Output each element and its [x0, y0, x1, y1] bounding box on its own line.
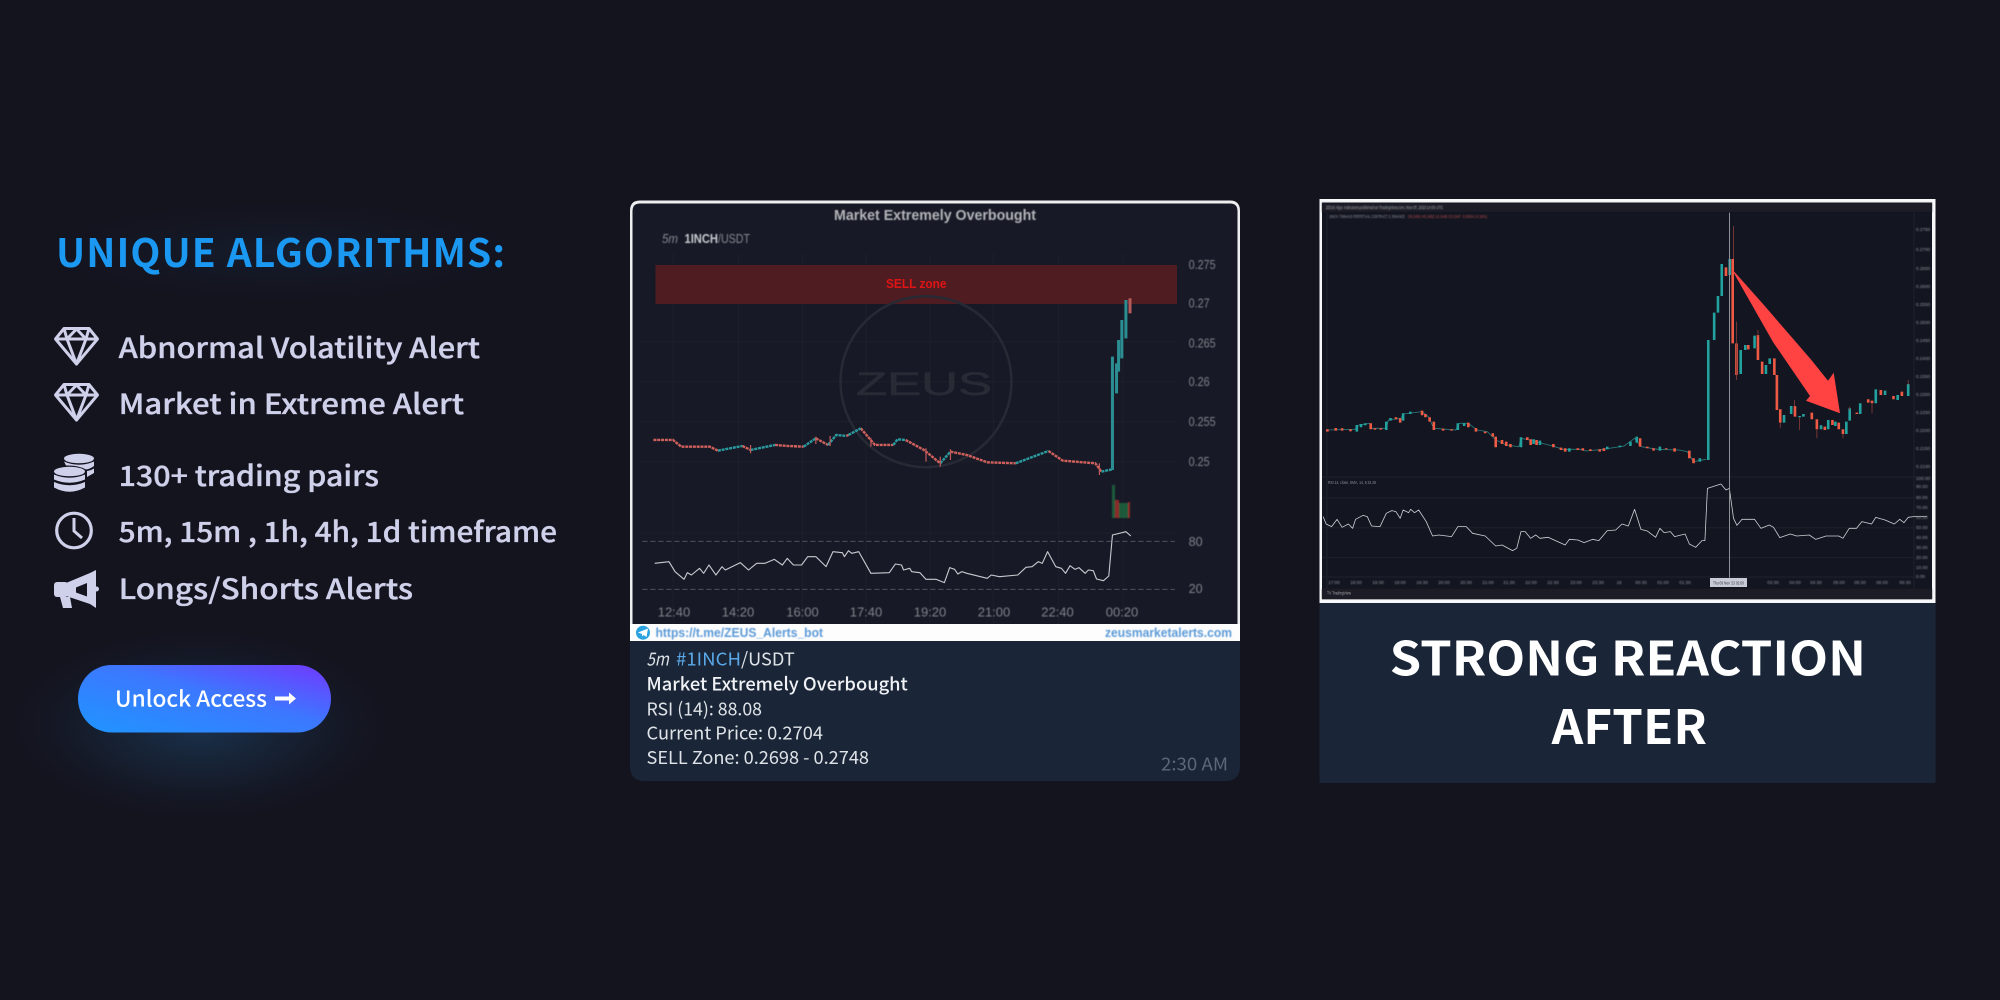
price axis ticks: 30.00: [1916, 545, 1928, 550]
chart frame: [1320, 199, 1936, 603]
heading: UNIQUE ALGORITHMS:: [56, 223, 505, 279]
sell zone: [656, 265, 1177, 304]
time axis ticks: 18:00: [1350, 580, 1362, 585]
icon: diamond: [56, 384, 98, 420]
time axis ticks: 00:30: [1635, 580, 1647, 585]
text: market in extreme: Market in Extreme Alert: [119, 383, 464, 423]
icon: coins: [54, 454, 94, 492]
caption box: #1INCH: [676, 646, 741, 672]
caption box: [1320, 603, 1936, 783]
text: trading pairs: 130+ trading pairs: [119, 455, 379, 495]
button glow: [0, 625, 400, 825]
volume bars: [1112, 485, 1130, 518]
time axis labels: 12:40: [658, 604, 690, 620]
time axis ticks: [1328, 580, 1911, 585]
time axis labels: 14:20: [722, 604, 754, 620]
icon: megaphone: [54, 570, 99, 608]
caption box: Current Price: 0.2704: [646, 720, 823, 746]
caption box: /USDT: [741, 646, 795, 672]
time axis ticks: 01:30: [1679, 580, 1691, 585]
panel: feature list: [0, 197, 557, 825]
price axis ticks: 0.2100: [1916, 464, 1930, 469]
price axis ticks: 80.00: [1916, 495, 1928, 500]
rsi axis labels: 80: [1189, 534, 1203, 549]
price axis labels: 0.26: [1189, 374, 1210, 389]
caption box: Market Extremely Overbought: [646, 671, 908, 697]
watermark: zeus: ZEUS: [856, 366, 992, 402]
price axis ticks: 0.2150: [1916, 446, 1930, 451]
caption box: 5m: [646, 646, 670, 672]
time axis labels: 22:40: [1041, 604, 1074, 620]
rsi axis labels: [1189, 534, 1203, 596]
price axis labels: [1189, 257, 1216, 469]
price axis ticks: 60.00: [1916, 515, 1928, 520]
chart background: [1322, 203, 1932, 599]
caption box: SELL Zone: 0.2698 - 0.2748: [646, 744, 869, 770]
red arrow: [1731, 268, 1840, 413]
price axis ticks: 0.2350: [1916, 374, 1930, 379]
text: longs shorts: Longs/Shorts Alerts: [119, 568, 413, 608]
crosshair: [1729, 213, 1730, 578]
price axis ticks: 0.00: [1916, 574, 1925, 579]
time axis ticks: 04:00: [1789, 580, 1801, 585]
text: abnormal volatility: Abnormal Volatility Alert: [119, 327, 480, 367]
caption box: 2:30 AM: [1161, 751, 1228, 777]
rsi axis labels: 20: [1189, 581, 1203, 596]
price axis ticks: 20.00: [1916, 555, 1928, 560]
header bars: [1322, 203, 1932, 599]
text: timeframes: 5m, 15m , 1h, 4h, 1d timeframe: [119, 511, 557, 551]
chart grid: [1322, 212, 1932, 589]
price axis labels: 0.27: [1189, 296, 1210, 310]
header bars: ZEUS Algo: Indicators published on TradingView.com, Nov 07, 2023 14:06 UTC: [1326, 205, 1443, 210]
time axis ticks: 21:00: [1482, 580, 1494, 585]
time axis ticks: 23:00: [1570, 580, 1582, 585]
header bars: O0.2451 H0.2452 L0.2445 C0.2447 -0.0004 (-0.16%): [1408, 214, 1487, 219]
time axis ticks: 22:00: [1525, 580, 1537, 585]
price axis labels: 0.275: [1189, 257, 1216, 272]
link strip: zeusmarketalerts.com: [1105, 625, 1232, 640]
price axis ticks: 100.00: [1916, 476, 1930, 481]
price axis ticks: 90.00: [1916, 484, 1928, 489]
time axis ticks: 19:30: [1416, 580, 1428, 585]
time axis labels: 21:00: [978, 604, 1010, 620]
time axis ticks: 20:30: [1460, 580, 1472, 585]
time axis ticks: 06:30: [1899, 580, 1911, 585]
price candles: [1326, 226, 1908, 463]
icon: clock: [57, 513, 91, 548]
caption box: [630, 641, 1240, 781]
header bars: 1INCH / TetherUS PERPETUAL CONTRACT, 5, BINANCE: [1329, 214, 1405, 219]
price axis ticks: 0.2450: [1916, 338, 1930, 343]
time axis labels: 00:20: [1106, 604, 1138, 620]
time axis ticks: 01:00: [1657, 580, 1669, 585]
time axis ticks: 04:30: [1810, 580, 1822, 585]
price axis labels: 0.265: [1189, 336, 1216, 350]
price axis ticks: 70.00: [1916, 505, 1928, 510]
time axis labels: 17:40: [850, 604, 882, 620]
icon: diamond: [56, 328, 98, 364]
time axis ticks: 19:00: [1394, 580, 1406, 585]
link strip: https://t.me/ZEUS_Alerts_bot: [656, 625, 824, 640]
button: unlock access: Unlock Access: [115, 682, 267, 714]
crosshair time tag: Thu 09 Nov '23 02:00: [1713, 580, 1744, 586]
chart grid: [640, 253, 1175, 653]
price axis ticks: 50.00: [1916, 525, 1928, 530]
button: unlock access: [78, 665, 331, 732]
sell zone: SELL zone: [886, 277, 947, 291]
heading glow: [10, 197, 550, 307]
chart logo: TV TradingView: [1327, 590, 1352, 596]
rsi label: RSI 14, close, SMA, 14, 5 32.28: [1328, 480, 1376, 485]
caption box: STRONG REACTION: [1390, 621, 1866, 690]
link strip: [630, 624, 1240, 641]
crosshair time tag: [1710, 578, 1747, 587]
chart background: [632, 204, 1238, 624]
card frame: [630, 200, 1240, 641]
panel: reaction chart: [1320, 199, 1936, 783]
watermark: zeus: [840, 296, 1012, 467]
price axis ticks: 0.2400: [1916, 356, 1930, 361]
chart title: Market Extremely Overbought: [834, 208, 1036, 224]
price candles: [653, 298, 1130, 475]
price axis labels: 0.25: [1189, 454, 1210, 469]
price axis ticks: 0.2250: [1916, 410, 1930, 415]
time axis labels: 19:20: [914, 604, 946, 620]
time axis ticks: 22:30: [1547, 580, 1559, 585]
pair label: [662, 231, 750, 246]
price axis ticks: 0.2600: [1916, 284, 1930, 289]
time axis ticks: 17:00: [1328, 580, 1340, 585]
price axis ticks: 0.2650: [1916, 266, 1930, 271]
time axis ticks: 21:30: [1503, 580, 1515, 585]
time axis ticks: 19:30: [1372, 580, 1384, 585]
time axis ticks: 05:00: [1833, 580, 1845, 585]
rsi line: [1323, 484, 1927, 551]
price axis ticks: 0.2550: [1916, 302, 1930, 307]
time axis ticks: 20:00: [1438, 580, 1450, 585]
price axis ticks: 0.2750: [1916, 227, 1930, 232]
price axis ticks: 0.2500: [1916, 320, 1930, 325]
price axis ticks: 0.2300: [1916, 392, 1930, 397]
pair label: 1INCH: [684, 231, 718, 246]
time axis labels: 16:00: [786, 604, 819, 620]
rsi chart: [642, 532, 1175, 589]
time axis labels: [658, 604, 1138, 620]
price axis ticks: 0.2200: [1916, 428, 1930, 433]
pair label: 5m: [662, 231, 678, 246]
time axis ticks: 23:30: [1592, 580, 1604, 585]
caption box: RSI (14): 88.08: [646, 696, 762, 722]
time axis ticks: 18: [1616, 580, 1622, 585]
price axis ticks: 10.00: [1916, 565, 1928, 570]
price axis ticks: [1916, 227, 1930, 579]
time axis ticks: 05:30: [1854, 580, 1866, 585]
panel: alert card: [630, 200, 1240, 781]
price axis ticks: 40.00: [1916, 535, 1928, 540]
pair label: /USDT: [718, 231, 750, 246]
price axis ticks: 0.2700: [1916, 247, 1930, 252]
price axis labels: 0.255: [1189, 414, 1216, 429]
caption box: AFTER: [1551, 689, 1707, 758]
time axis ticks: 06:00: [1876, 580, 1888, 585]
time axis ticks: 03:30: [1767, 580, 1779, 585]
